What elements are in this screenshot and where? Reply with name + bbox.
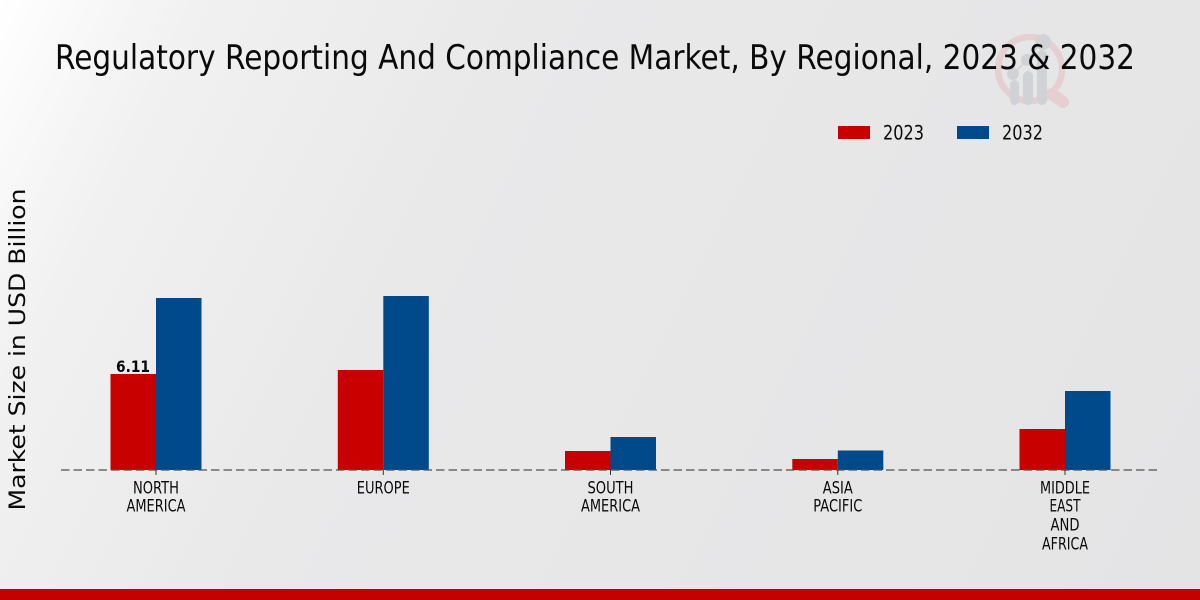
y axis label: Market Size in USD Billion [5,188,31,510]
legend item: 2032 [957,122,1043,144]
bars: Middle East and Africa [1020,391,1110,470]
x label: South America: SOUTH [588,478,634,498]
x label: Asia Pacific [813,478,862,516]
baseline axis [61,469,1159,471]
x label: South America [581,478,641,516]
x label: Middle East and Africa: MIDDLE [1040,478,1090,498]
x label: North America [126,478,186,516]
bar chart [61,296,1159,475]
footer bar [0,589,1200,600]
legend item: 2032: 2032 [1002,122,1043,144]
icon: watermark magnifier with bars [998,34,1063,105]
bars: Asia Pacific [792,450,883,470]
x label: North America: AMERICA [126,496,186,516]
bars: North America [110,298,202,470]
x label: Asia Pacific: PACIFIC [813,496,862,516]
x label: Middle East and Africa: AFRICA [1042,534,1089,554]
legend item: 2023 [838,122,924,144]
x label: Europe: EUROPE [357,478,410,498]
value label: 6.11: 6.11 [116,357,150,376]
legend [838,122,1043,144]
x label: North America: NORTH [133,478,179,498]
bars: Europe [338,296,429,470]
x label: Asia Pacific: ASIA [823,478,853,498]
bars: South America [565,437,656,470]
x label: Middle East and Africa: EAST [1050,496,1081,516]
x label: South America: AMERICA [581,496,641,516]
x label: Middle East and Africa [1040,478,1090,554]
legend item: 2023: 2023 [883,122,924,144]
x label: Middle East and Africa: AND [1050,516,1080,534]
